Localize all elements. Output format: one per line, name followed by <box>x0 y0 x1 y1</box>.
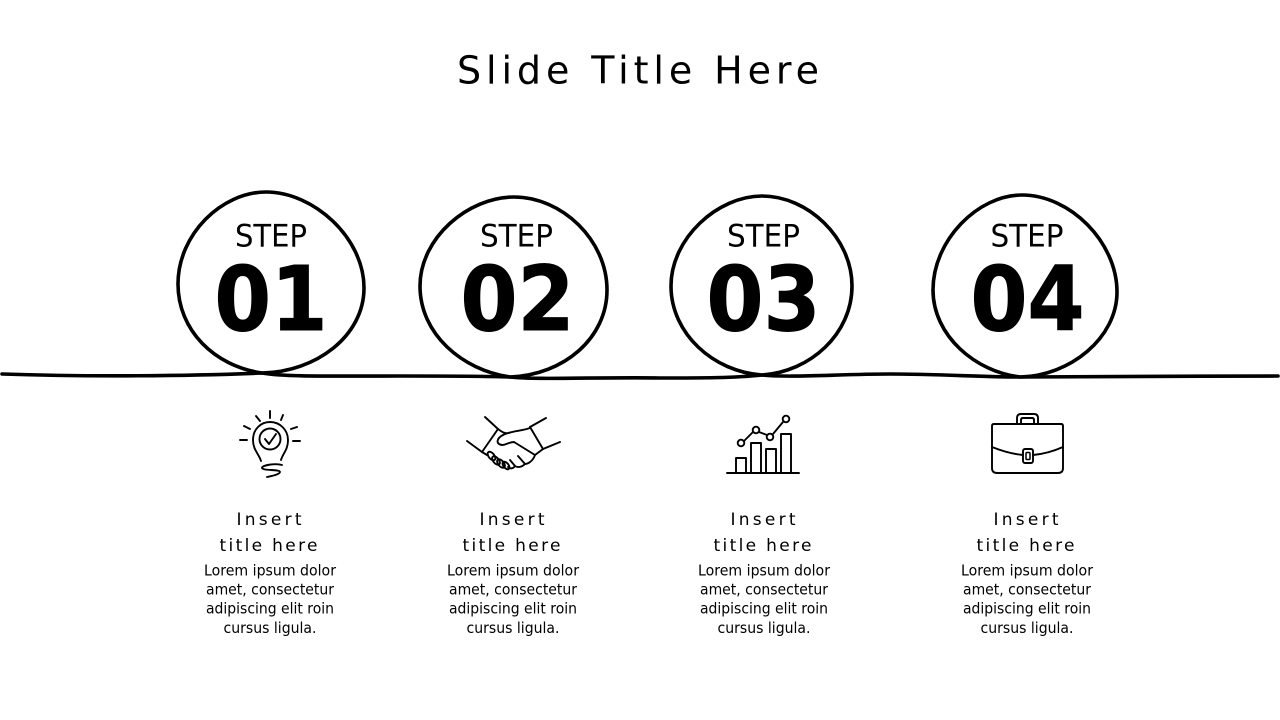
text block: step 01: title here <box>220 536 318 556</box>
step 04 badge label: 04 <box>970 247 1084 351</box>
text block: step 01: adipiscing elit roin <box>206 600 334 618</box>
text block: step 01: cursus ligula. <box>224 619 316 637</box>
text block: step 04: title here <box>976 536 1074 556</box>
text block: step 04: adipiscing elit roin <box>963 600 1091 618</box>
text block: step 01: amet, consectetur <box>206 580 335 598</box>
text block: step 02: title here <box>462 536 560 556</box>
text block: step 02 <box>447 510 580 637</box>
text block: step 02: cursus ligula. <box>466 619 560 637</box>
text block: step 01 <box>204 510 337 637</box>
step 04 badge label: STEP <box>990 218 1064 254</box>
step 03 badge label: 03 <box>706 247 820 351</box>
icon: briefcase <box>992 414 1063 473</box>
step 01 badge label: STEP <box>235 218 307 254</box>
text block: step 03: cursus ligula. <box>718 619 810 637</box>
text block: step 04: Lorem ipsum dolor <box>961 562 1094 580</box>
step 01 badge label: 01 <box>214 247 328 351</box>
timeline line with step loops <box>2 192 1278 378</box>
text block: step 02: Insert <box>480 510 545 530</box>
title: Slide Title Here <box>457 48 819 92</box>
text block: step 02: amet, consectetur <box>449 580 578 598</box>
text block: step 03: title here <box>714 536 812 556</box>
text block: step 02: Lorem ipsum dolor <box>447 562 580 580</box>
text block: step 01: Insert <box>236 510 302 530</box>
text block: step 03: adipiscing elit roin <box>700 600 828 618</box>
text block: step 03: Lorem ipsum dolor <box>698 562 831 580</box>
text block: step 04 <box>961 510 1094 637</box>
icon: light bulb with check <box>240 411 300 477</box>
step 02 badge label: 02 <box>460 247 574 351</box>
step 02 badge label: STEP <box>480 218 553 254</box>
text block: step 03: amet, consectetur <box>700 580 829 598</box>
text block: step 03 <box>698 510 831 637</box>
icon: handshake <box>467 417 560 471</box>
text block: step 02: adipiscing elit roin <box>449 600 577 618</box>
text block: step 03: Insert <box>730 510 796 530</box>
text block: step 01: Lorem ipsum dolor <box>204 562 337 580</box>
step 03 badge label: STEP <box>727 218 800 254</box>
text block: step 04: Insert <box>994 510 1059 530</box>
text block: step 04: cursus ligula. <box>980 619 1074 637</box>
icon: bar chart with trend line <box>727 416 799 473</box>
text block: step 04: amet, consectetur <box>963 580 1092 598</box>
